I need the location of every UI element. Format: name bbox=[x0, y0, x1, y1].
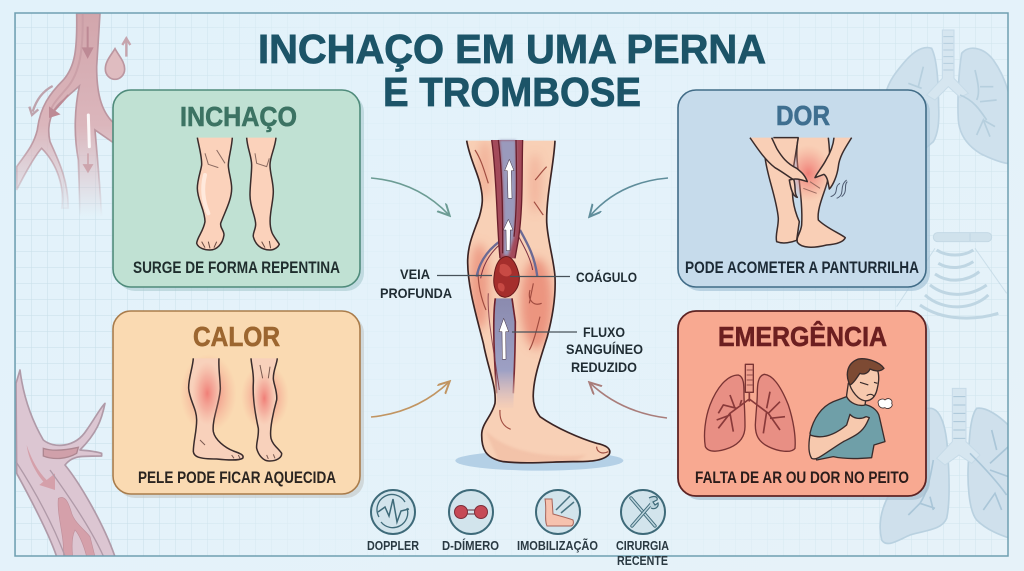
panel: dor bbox=[678, 90, 930, 291]
label: fluxo sanguíneo reduzido: REDUZIDO bbox=[571, 359, 637, 375]
muscle lines bbox=[475, 150, 608, 453]
central leg illustration bbox=[455, 140, 623, 471]
panel: calor bbox=[113, 311, 364, 498]
panel: inchaço bbox=[113, 90, 364, 291]
panel: emergência bbox=[678, 311, 930, 500]
flow arrows bbox=[499, 159, 514, 359]
label: coágulo: COÁGULO bbox=[576, 269, 637, 285]
label: fluxo sanguíneo reduzido bbox=[512, 324, 643, 375]
icon: cirurgia bbox=[621, 490, 665, 534]
label: veia profunda bbox=[380, 266, 492, 301]
icon: swollen legs bbox=[197, 138, 279, 250]
label: d-dímero: D-DÍMERO bbox=[442, 538, 499, 553]
label: cirurgia recente bbox=[616, 538, 670, 568]
arrow: calor to leg bbox=[371, 382, 449, 417]
label: cirurgia recente: RECENTE bbox=[617, 553, 668, 568]
caption: dor: PODE ACOMETER A PANTURRILHA bbox=[685, 259, 919, 277]
icon: imobilização bbox=[536, 490, 580, 534]
leg outline bbox=[467, 141, 610, 463]
heading: calor: CALOR bbox=[193, 321, 280, 352]
caption: inchaço: SURGE DE FORMA REPENTINA bbox=[133, 259, 340, 277]
icon: man with chest pain bbox=[809, 359, 892, 460]
background: lungs bottom right bbox=[880, 388, 1010, 544]
arrow: emergência to leg bbox=[590, 383, 667, 418]
label: cirurgia recente: CIRURGIA bbox=[616, 538, 670, 553]
arrow: inchaço to leg bbox=[371, 178, 449, 215]
label: imobilização: IMOBILIZAÇÃO bbox=[517, 538, 598, 553]
icon: d-dímero bbox=[449, 490, 493, 534]
deep vein upper bbox=[492, 140, 523, 258]
heading: emergência: EMERGÊNCIA bbox=[718, 321, 887, 352]
label: veia profunda: PROFUNDA bbox=[380, 285, 452, 301]
floor shadow bbox=[455, 451, 623, 471]
clot bbox=[494, 256, 519, 297]
title bbox=[258, 26, 766, 115]
skin shading bbox=[469, 140, 587, 463]
title: E TROMBOSE bbox=[383, 69, 641, 115]
icon: warm legs bbox=[180, 354, 289, 461]
label: fluxo sanguíneo reduzido: SANGUÍNEO bbox=[566, 341, 643, 357]
heading: inchaço: INCHAÇO bbox=[180, 101, 297, 132]
arrow: dor to leg bbox=[590, 178, 668, 216]
deep vein lower bbox=[494, 298, 515, 408]
label: fluxo sanguíneo reduzido: FLUXO bbox=[583, 324, 625, 340]
title: INCHAÇO EM UMA PERNA bbox=[258, 26, 766, 72]
side veins bbox=[477, 230, 537, 277]
icon: doppler bbox=[371, 490, 415, 534]
leg base bbox=[467, 141, 610, 463]
heading: dor: DOR bbox=[776, 100, 830, 131]
label: coágulo bbox=[510, 269, 637, 285]
background: lungs top right bbox=[887, 30, 1012, 164]
label: doppler: DOPPLER bbox=[367, 538, 420, 553]
icon: lungs bbox=[705, 364, 795, 451]
background: veins top left bbox=[17, 13, 130, 217]
label: veia profunda: VEIA bbox=[400, 266, 430, 282]
icon: leg with calf pain bbox=[750, 138, 852, 247]
caption: calor: PELE PODE FICAR AQUECIDA bbox=[138, 469, 336, 487]
background: vessels bottom left bbox=[16, 370, 115, 557]
icon row bbox=[367, 490, 670, 568]
background: ultrasound probe bbox=[897, 233, 1007, 318]
caption: emergência: FALTA DE AR OU DOR NO PEITO bbox=[695, 469, 909, 487]
